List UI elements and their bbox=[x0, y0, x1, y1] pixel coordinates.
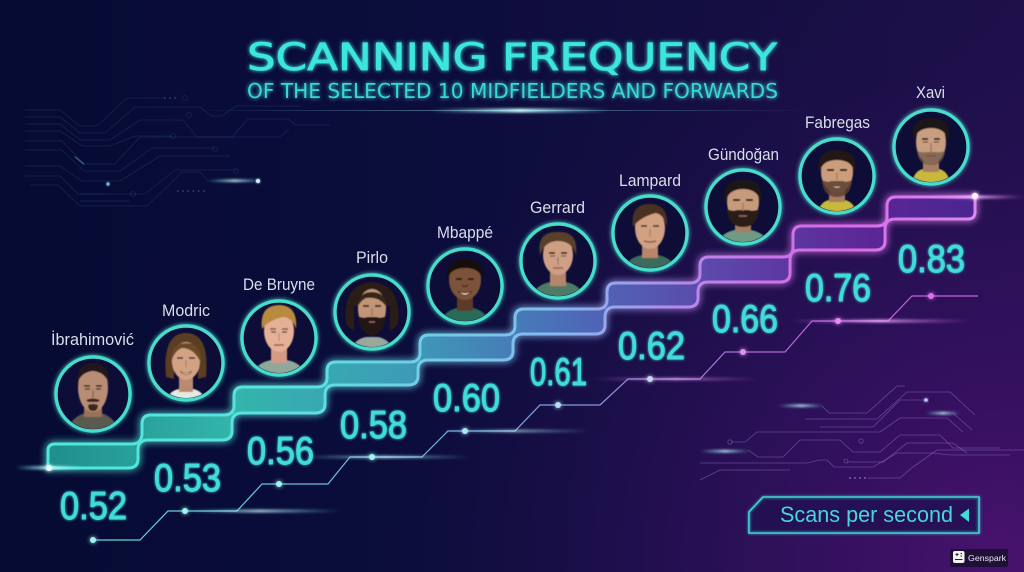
portrait: Gundogan bbox=[706, 170, 780, 247]
circuit traces: top left bbox=[25, 96, 330, 206]
name: Modric: Modric bbox=[162, 301, 210, 320]
value 0.61: 0.61 bbox=[530, 351, 587, 394]
portrait: Fabregas bbox=[800, 139, 874, 216]
value 0.58: 0.58 bbox=[340, 404, 407, 447]
value 0.60: 0.60 bbox=[433, 377, 500, 420]
badge: Genspark: Genspark bbox=[968, 553, 1007, 563]
name: Pirlo: Pirlo bbox=[356, 248, 388, 267]
value 0.52: 0.52 bbox=[60, 485, 127, 528]
name: De Bruyne: De Bruyne bbox=[243, 275, 315, 294]
name: Mbappe: Mbappé bbox=[437, 223, 493, 242]
icon: Genspark logo bbox=[953, 551, 964, 563]
data points bbox=[90, 293, 934, 543]
icon: left triangle bbox=[960, 508, 969, 522]
end flare bbox=[930, 193, 1024, 199]
value 0.62: 0.62 bbox=[618, 325, 685, 368]
portrait: Ibrahimovic bbox=[56, 357, 130, 434]
value 0.76: 0.76 bbox=[805, 267, 871, 310]
portrait: De Bruyne bbox=[242, 301, 316, 378]
name: Fabregas: Fabregas bbox=[805, 113, 870, 132]
subheading: OF THE SELECTED 10 MIDFIELDERS AND FORWARDS bbox=[247, 79, 778, 103]
circuit traces: lower right bbox=[700, 386, 1024, 480]
value 0.66: 0.66 bbox=[712, 298, 778, 341]
portrait: Mbappe bbox=[428, 249, 502, 326]
start flare bbox=[15, 465, 85, 471]
lower glowing data line bbox=[90, 293, 978, 543]
name: Gerrard: Gerrard bbox=[530, 198, 585, 217]
heading: scanning frequency: SCANNING FREQUENCY bbox=[247, 36, 777, 79]
legend: scans per second: Scans per second bbox=[780, 502, 953, 527]
name: Ibrahimovic: İbrahimović bbox=[51, 330, 134, 349]
name: Xavi: Xavi bbox=[916, 83, 945, 102]
names bbox=[51, 83, 945, 349]
portrait: Gerrard bbox=[521, 224, 595, 301]
stepped ribbon chart bbox=[15, 193, 1024, 471]
value 0.53: 0.53 bbox=[154, 457, 221, 500]
values bbox=[60, 238, 965, 528]
value 0.56: 0.56 bbox=[247, 430, 314, 473]
legend: scans per second bbox=[749, 497, 979, 533]
badge: Genspark bbox=[950, 549, 1008, 567]
value 0.83: 0.83 bbox=[898, 238, 965, 281]
portrait: Lampard bbox=[613, 196, 687, 273]
portrait: Xavi bbox=[894, 110, 968, 187]
title underline glow bbox=[190, 108, 810, 112]
name: Gundogan: Gündoğan bbox=[708, 145, 779, 164]
title bbox=[247, 36, 778, 103]
portrait: Pirlo bbox=[335, 275, 409, 352]
portrait: Modric bbox=[149, 326, 223, 403]
name: Lampard: Lampard bbox=[619, 171, 681, 190]
